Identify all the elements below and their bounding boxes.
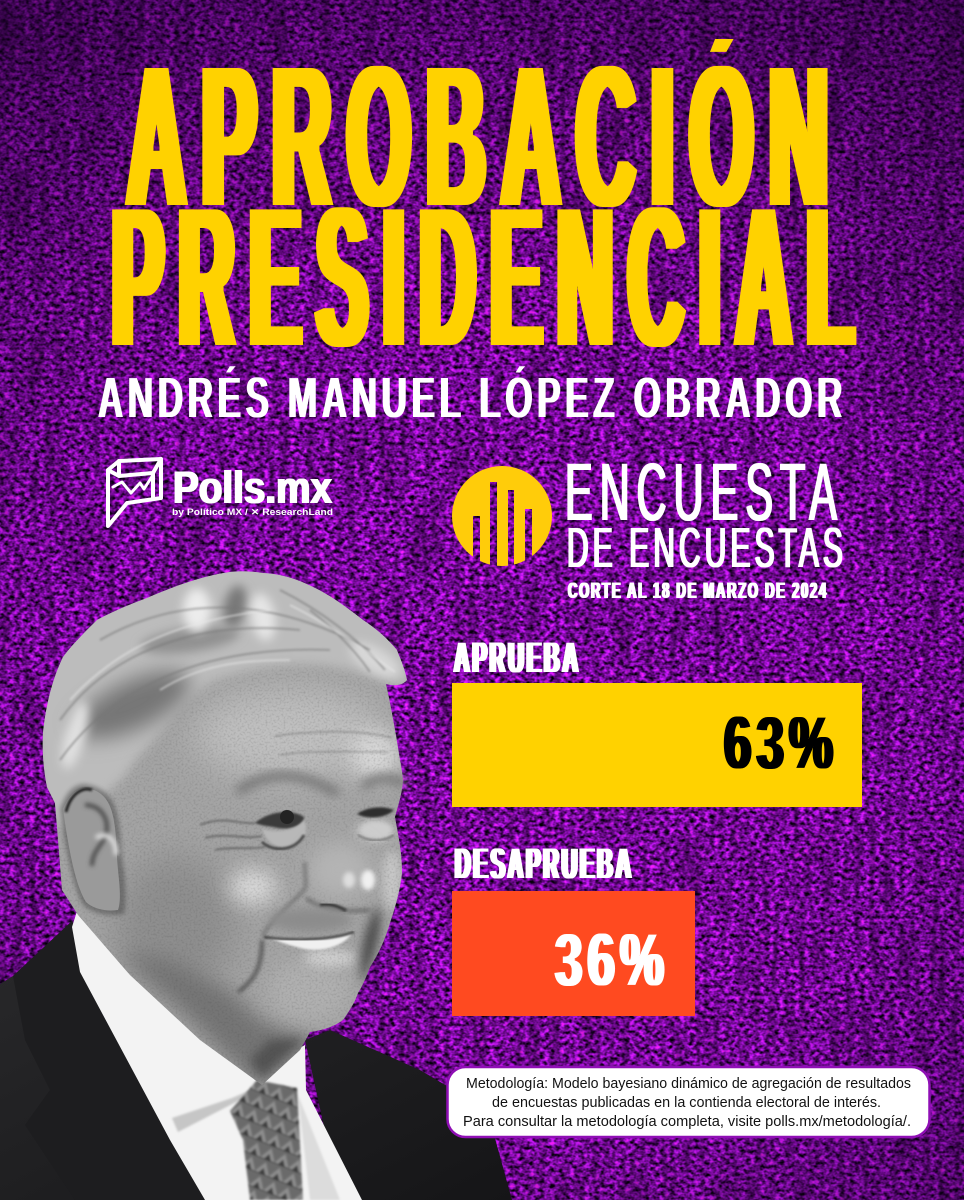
jaw and neck shadow [126,950,312,1085]
note text [463,1075,911,1130]
logo: Polls.mx [108,459,333,526]
right eye socket light [355,822,395,842]
chin tone [268,958,352,1022]
forehead wrinkles [275,732,392,755]
eyebrow shadows [240,776,402,792]
portrait: black and white photo of the president [0,560,512,1200]
icon: speech box with line chart [108,459,161,526]
text: DESAPRUEBA [455,838,634,889]
text: APRUEBA [454,632,581,683]
note text: Para consultar la metodología completa, visite polls.mx/metodología/. [463,1113,911,1130]
forehead light [195,690,385,780]
cheek tone [115,855,235,995]
hair mass [30,560,410,830]
methodology note [448,1067,930,1137]
eye: left [255,810,306,849]
head [42,571,407,1085]
smile [238,908,354,992]
note text: Metodología: Modelo bayesiano dinámico de agregación de resultados [466,1075,911,1092]
nose [262,842,375,936]
eye: right [357,807,394,840]
fine skin grain [58,665,402,1082]
ear [63,788,120,911]
hair dark patch [80,660,199,750]
logo: Encuesta de Encuestas [452,463,842,568]
value 63%: 63% [724,701,838,786]
tie [230,1080,303,1200]
logo tagline: by Político MX / ✕ ResearchLand [172,507,333,517]
bar: aprueba 63% [452,683,862,807]
right cheek shadow [361,905,380,985]
suit [0,921,512,1200]
icon: yellow circle with bars [452,466,552,566]
bar: desaprueba 36% [452,891,695,1016]
crow's feet wrinkles [200,820,265,850]
hair strands [60,590,385,760]
hair highlights [183,588,211,632]
logo wordmark: Polls.mx [173,462,332,513]
shirt collar base [72,908,362,1200]
title [112,39,856,347]
ear shadow around [60,784,126,915]
note text: de encuestas publicadas en la contienda electoral de interés. [492,1094,881,1111]
value 36%: 36% [555,918,669,1003]
